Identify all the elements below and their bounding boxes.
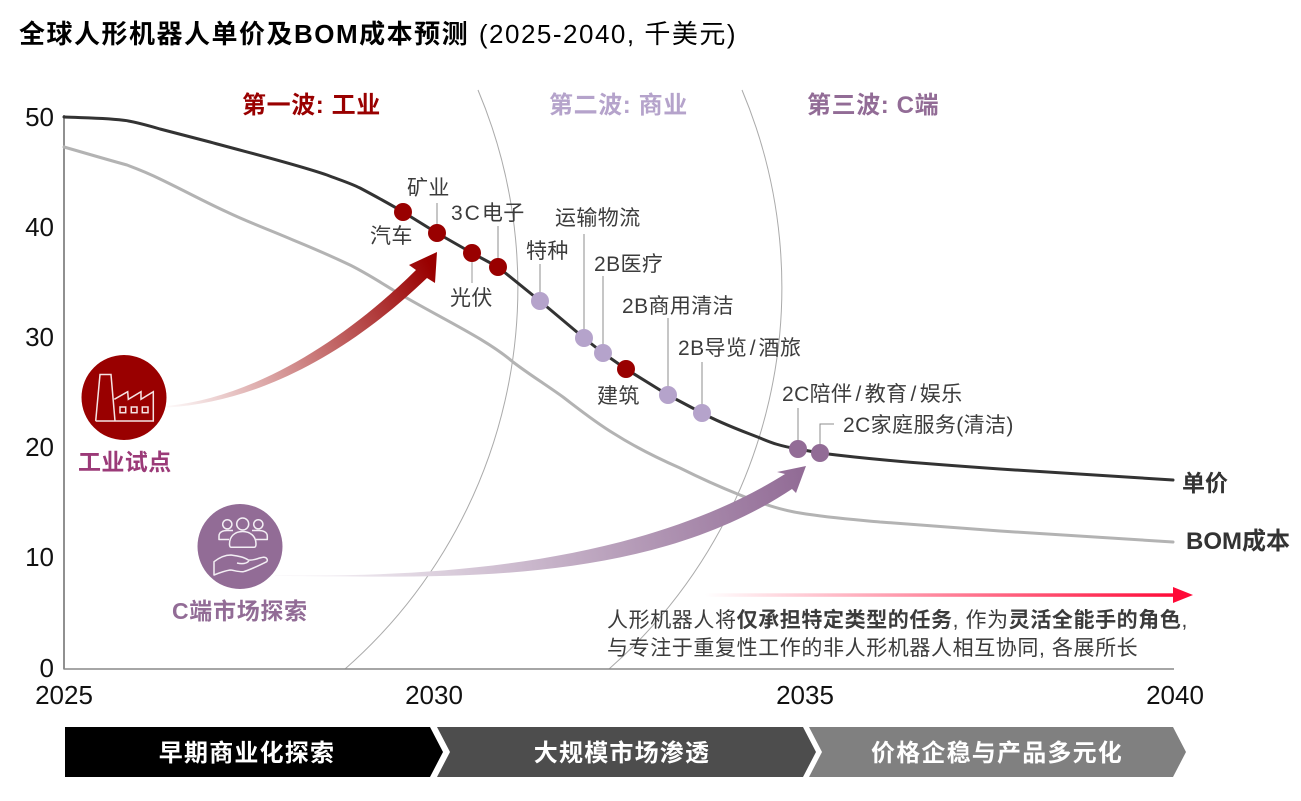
phase bar: early: 早期商业化探索 [159,740,335,767]
arrow: red gradient [705,587,1193,603]
marker labels: 光伏 [450,287,493,310]
line label: BOM cost: BOM成本 [1186,528,1290,555]
y axis labels [25,102,54,683]
callout text: 与专注于重复性工作的非人形机器人相互协同, 各展所长 [607,637,1138,660]
marker labels: 2B商用清洁 [622,295,734,318]
marker labels: 2C家庭服务(清洁) [843,414,1014,437]
marker labels: 3C电子 [451,202,525,225]
marker labels [370,177,1014,437]
wave boundary arcs [345,90,782,669]
line: unit price [64,117,1173,480]
arrow: consumer exploration [275,466,806,577]
marker labels: 建筑 [597,385,640,408]
icon: people and hand [198,504,282,589]
label: industrial pilot: 工业试点 [78,449,172,475]
line label: unit price: 单价 [1182,470,1228,496]
callout text [607,608,1188,660]
axes [64,115,1174,670]
title: 全球人形机器人单价及BOM成本预测 (2025-2040, 千美元) [19,19,737,49]
label: consumer market exploration: C端市场探索 [172,598,308,624]
marker labels: 2B导览/酒旅 [678,337,801,360]
wave heading: second wave: 第二波: 商业 [549,92,688,119]
icon: factory [82,355,166,440]
callout text: 人形机器人将仅承担特定类型的任务, 作为灵活全能手的角色, [607,608,1188,632]
phase bar: diversified [809,727,1186,777]
wave heading: third wave: 第三波: C端 [807,92,939,119]
y axis labels: 20 [25,432,54,462]
wave heading: first wave: 第一波: 工业 [242,92,381,119]
y axis labels: 10 [25,542,54,572]
marker labels: 运输物流 [555,207,641,230]
phase bar: diversified: 价格企稳与产品多元化 [871,740,1123,767]
y axis labels: 40 [25,212,54,242]
line: BOM cost [64,147,1173,542]
marker labels: 矿业 [407,177,450,200]
phase bar: scale [437,727,816,777]
marker labels: 2B医疗 [594,253,663,276]
leader lines [437,203,834,445]
y axis labels: 30 [25,322,54,352]
phase bar: early [65,727,443,777]
x axis labels [35,680,1204,710]
x axis labels: 2030 [405,680,463,710]
x axis labels: 2040 [1146,680,1204,710]
x axis labels: 2025 [35,680,93,710]
x axis labels: 2035 [776,680,834,710]
arrow: industrial pilot [167,252,437,408]
phase bar: scale: 大规模市场渗透 [534,739,710,767]
y axis labels: 50 [25,102,54,132]
marker labels: 特种 [526,240,569,263]
y axis labels: 0 [40,653,54,683]
markers [394,203,829,462]
marker labels: 汽车 [370,225,413,248]
marker labels: 2C陪伴/教育/娱乐 [782,383,963,406]
